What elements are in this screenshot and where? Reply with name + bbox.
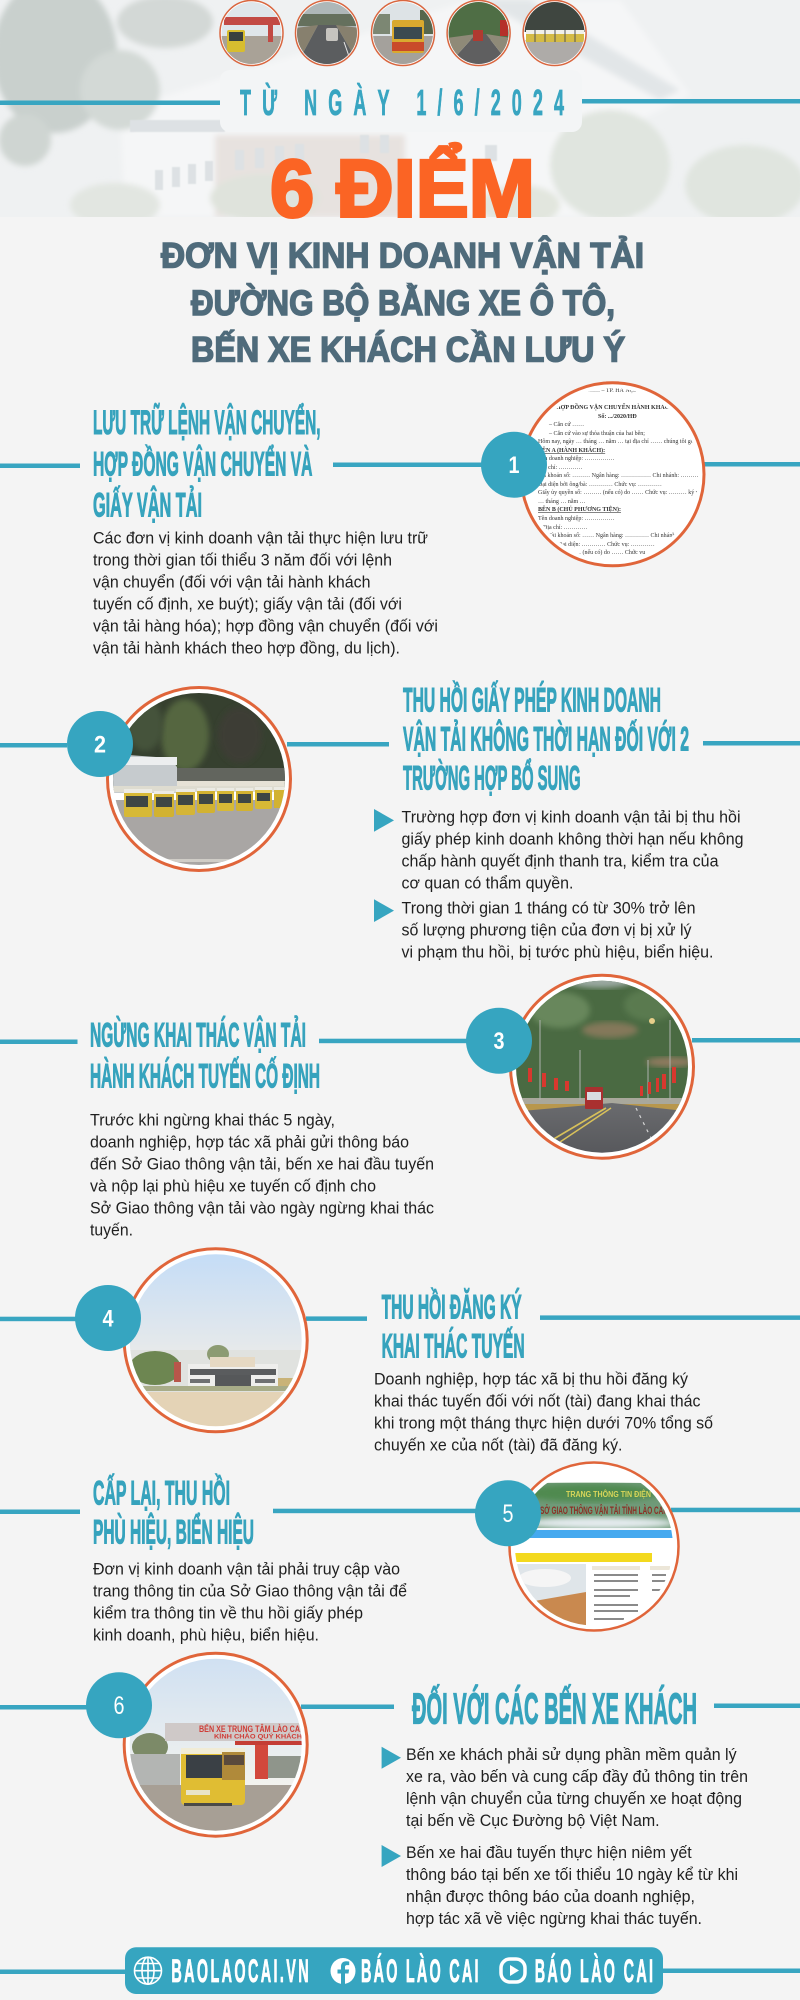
section 1 body text: tuyến cố định, xe buýt); giấy vận tải (đối với	[93, 595, 402, 613]
panel: section 5: PHÙ HIỆU, BIỂN HIỆU	[93, 1513, 254, 1551]
date banner	[0, 70, 800, 132]
bullet arrow	[382, 1747, 401, 1769]
section 5 heading	[93, 1474, 254, 1551]
section 3 body text: Sở Giao thông vận tải vào ngày ngừng khai thác	[90, 1200, 434, 1218]
section 1 photo: contract document: BÊN A (HÀNH KHÁCH):	[538, 446, 605, 454]
bullet arrow	[382, 1845, 401, 1867]
panel: section 4	[0, 1249, 800, 1454]
bullet 6.2: hợp tác xã về việc ngừng khai thác tuyến.	[406, 1910, 702, 1928]
youtube label: BÁO LÀO CAI	[535, 1954, 653, 1990]
bullet arrow	[374, 899, 394, 922]
section 1 body text: trong thời gian tối thiểu 3 năm đối với lệnh	[93, 551, 392, 569]
number badge 6	[86, 1672, 152, 1738]
date text: TỪ NGÀY 1/6/2024	[240, 83, 564, 124]
footer bar	[0, 1947, 800, 1994]
section 1 heading: GIẤY VẬN TẢI	[93, 487, 202, 525]
subtitle: BẾN XE KHÁCH CẦN LƯU Ý	[191, 330, 625, 370]
bullet 2.1: chấp hành quyết định thanh tra, kiểm tra của	[402, 852, 719, 870]
panel: section 3: HÀNH KHÁCH TUYẾN CỐ ĐỊNH	[90, 1057, 320, 1096]
photo: city bus	[372, 0, 436, 66]
section 1 body text	[93, 529, 438, 657]
section 1 photo: contract document: HỢP ĐỒNG VẬN CHUYỂN HÀNH KHÁCH (HẠNH)	[556, 403, 697, 411]
section 1 body text: Các đơn vị kinh doanh vận tải thực hiện lưu trữ	[93, 529, 428, 547]
section 2 heading: TRƯỜNG HỢP BỔ SUNG	[403, 759, 580, 797]
bullet 6.1: Bến xe khách phải sử dụng phần mềm quản lý	[406, 1746, 737, 1764]
number badge 1	[481, 432, 547, 498]
section 1 photo: contract document: Số: .../2020/HĐ	[598, 413, 637, 420]
section 3 body text: Trước khi ngừng khai thác 5 ngày,	[90, 1112, 335, 1130]
section 5 photo: website screenshot: TRANG THÔNG TIN ĐIỆN	[566, 1490, 651, 1499]
section 1 photo: contract document: Đại diện bởi ông/bà: ………… Chức vụ: …………	[538, 482, 662, 488]
number badge 4: 4	[102, 1306, 114, 1332]
bullet arrow	[374, 809, 394, 832]
number badge 3: 3	[494, 1028, 504, 1055]
section 4 body text: khi trong một tháng thực hiện dưới 70% tổng số	[374, 1414, 713, 1432]
number badge 1: 1	[508, 452, 520, 479]
bullet 6.1: lệnh vận chuyển của từng chuyến xe hoạt động	[406, 1790, 742, 1808]
section 3 body text: và nộp lại phù hiệu xe tuyến cố định cho	[90, 1178, 376, 1196]
section 3 body text	[90, 1112, 434, 1240]
section 3 body text: doanh nghiệp, hợp tác xã phải gửi thông báo	[90, 1134, 409, 1152]
section 1 photo: contract document: Tài khoản số: ……… Ngân hàng: …………… Chi nhánh: ……………	[538, 472, 710, 479]
section 3 heading	[90, 1017, 320, 1096]
bullet 2.2: Trong thời gian 1 tháng có từ 30% trở lên	[402, 899, 696, 917]
bullet 2.2: số lượng phương tiện của đơn vị bị xử lý	[402, 921, 692, 939]
number badge 5	[475, 1480, 541, 1546]
bullet 2.1: cơ quan có thẩm quyền.	[402, 874, 574, 892]
number badge 4	[75, 1285, 141, 1351]
header background photo	[0, 0, 800, 227]
bullet 2.1: giấy phép kinh doanh không thời hạn nếu không	[402, 830, 744, 848]
panel: section 4: THU HỒI ĐĂNG KÝ	[382, 1288, 522, 1326]
panel: section 3	[0, 972, 800, 1240]
bullet 6.2	[382, 1844, 738, 1928]
section 1 photo: contract document: Đại diện: ………… Chức vụ: …………	[558, 542, 655, 548]
bullet 2.2	[374, 899, 714, 961]
section 5 heading: CẤP LẠI, THU HỒI	[93, 1474, 230, 1512]
panel: section 2	[0, 682, 800, 961]
bullet 6.2: Bến xe hai đầu tuyến thực hiện niêm yết	[406, 1844, 692, 1862]
section 5 body text: Đơn vị kinh doanh vận tải phải truy cập vào	[93, 1560, 400, 1578]
section 6 photo: bus station gate	[124, 1653, 307, 1836]
section 1 photo: contract document: …… – TP. HÀ NỘI ……	[588, 386, 650, 394]
section 4 photo: bus terminal building	[124, 1249, 307, 1432]
section 1 photo: contract document: … (nếu có) do …… Chức vụ	[575, 549, 645, 556]
bullet 6.1: xe ra, vào bến và cung cấp đầy đủ thông tin trên	[406, 1768, 748, 1786]
number badge 5: 5	[502, 1500, 514, 1528]
photo: bus fleet	[523, 0, 587, 66]
section 1 photo: contract document: – Căn cứ ……	[548, 422, 584, 428]
website label: BAOLAOCAI.VN	[171, 1955, 309, 1990]
section 1 body text: vận tải hàng hóa); hợp đồng vận chuyển (đối với	[93, 617, 438, 635]
section 5 body text: kiểm tra thông tin về thu hồi giấy phép	[93, 1604, 363, 1622]
section 4 body text: chuyến xe của nốt (tài) đã đăng ký.	[374, 1436, 622, 1454]
icon: globe	[134, 1957, 162, 1984]
section 1 photo: contract document: – Căn cứ vào sự thỏa thuận của hai bên;	[548, 431, 645, 437]
section 6 photo: bus station gate: BẾN XE TRUNG TÂM LÀO CAI	[199, 1723, 302, 1734]
bullet 2.2: vi phạm thu hồi, bị tước phù hiệu, biển hiệu.	[402, 943, 714, 961]
section 3 body text: tuyến.	[90, 1222, 133, 1240]
number badge 2: 2	[94, 732, 106, 758]
section 2 photo: bus depot	[108, 688, 290, 870]
section 4 heading	[382, 1288, 525, 1365]
header photo strip	[220, 0, 587, 66]
icon: facebook	[330, 1958, 356, 1984]
photo: bus station gate	[220, 0, 284, 66]
section 1 photo: contract document: … tháng … năm …	[538, 499, 586, 505]
section 1 photo: contract document	[521, 383, 718, 566]
section 4 body text: khai thác tuyến đối với nốt (tài) đang khai thác	[374, 1392, 700, 1410]
subtitle	[161, 236, 644, 370]
section 3 body text: đến Sở Giao thông vận tải, bến xe hai đầu tuyến	[90, 1156, 434, 1174]
subtitle: ĐƯỜNG BỘ BẰNG XE Ô TÔ,	[191, 283, 615, 323]
bullet 2.1	[374, 808, 744, 892]
number badge 2	[67, 711, 133, 777]
icon: youtube	[501, 1959, 525, 1982]
section 2 heading	[403, 682, 689, 797]
section 5 photo: website screenshot: SỞ GIAO THÔNG VẬN TẢI TỈNH LÀO CAI	[540, 1504, 665, 1517]
subtitle: ĐƠN VỊ KINH DOANH VẬN TẢI	[161, 236, 644, 276]
bullet 6.1	[382, 1746, 748, 1830]
panel: section 6	[0, 1653, 800, 1928]
section 1 photo: contract document: Tên doanh nghiệp: ……………	[538, 456, 614, 462]
section 1 photo: contract document: Tài khoản số: …… Ngân hàng: ………… Chi nhánh: ………	[548, 532, 696, 539]
section 1 heading	[93, 404, 320, 525]
section 5 photo: website screenshot	[510, 1462, 678, 1630]
number badge 3	[466, 1008, 532, 1074]
photo: mountain road	[447, 0, 511, 66]
panel: section 1: HỢP ĐỒNG VẬN CHUYỂN VÀ	[93, 445, 312, 483]
bullet 6.1: tại bến về Cục Đường bộ Việt Nam.	[406, 1812, 660, 1830]
section 1 photo: contract document: Giấy ủy quyền số: ……… (nếu có) do …… Chức vụ: ……… ký vào ngày	[538, 489, 718, 496]
panel: section 1: LƯU TRỮ LỆNH VẬN CHUYỂN,	[93, 404, 320, 442]
section 1 photo: contract document: Địa chỉ: …………	[543, 525, 588, 531]
panel: section 4: KHAI THÁC TUYẾN	[382, 1327, 525, 1365]
section 4 body text: Doanh nghiệp, hợp tác xã bị thu hồi đăng ký	[374, 1370, 689, 1388]
section 1 photo: contract document: Tên doanh nghiệp: ……………	[538, 516, 614, 522]
section 6 photo: bus station gate: KÍNH CHÀO QUÝ KHÁCH	[214, 1732, 302, 1740]
section 1 body text: vận tải hành khách theo hợp đồng, du lịch).	[93, 639, 400, 657]
bullet 6.2: nhận được thông báo của doanh nghiệp,	[406, 1888, 695, 1906]
section 5 body text: kinh doanh, phù hiệu, biển hiệu.	[93, 1626, 319, 1644]
section 1 photo: contract document: Địa chỉ: …………	[538, 465, 583, 471]
section 3 photo: mountain road	[510, 972, 694, 1160]
section 1 body text: vận chuyển (đối với vận tải hành khách	[93, 573, 370, 591]
section 4 body text	[374, 1370, 713, 1454]
facebook label: BÁO LÀO CAI	[361, 1954, 478, 1990]
bullet 2.1: Trường hợp đơn vị kinh doanh vận tải bị thu hồi	[402, 808, 740, 826]
bullet 6.2: thông báo tại bến xe tối thiểu 10 ngày kể từ khi	[406, 1866, 738, 1884]
section 5 body text	[93, 1560, 407, 1644]
main heading: 6 điểm: 6 ĐIỂM	[270, 144, 535, 234]
panel: section 5	[0, 1462, 800, 1644]
section 1 photo: contract document: Hôm nay, ngày … tháng … năm … tại địa chỉ …… chúng tôi gồm có	[538, 438, 706, 445]
number badge 6: 6	[114, 1692, 124, 1720]
section 1 photo: contract document: BÊN B (CHỦ PHƯƠNG TIỆN):	[538, 505, 621, 513]
panel: section 1	[0, 383, 800, 657]
panel: section 3: NGỪNG KHAI THÁC VẬN TẢI	[90, 1017, 306, 1055]
section 5 body text: trang thông tin của Sở Giao thông vận tải để	[93, 1582, 407, 1600]
photo: highway	[296, 0, 360, 66]
